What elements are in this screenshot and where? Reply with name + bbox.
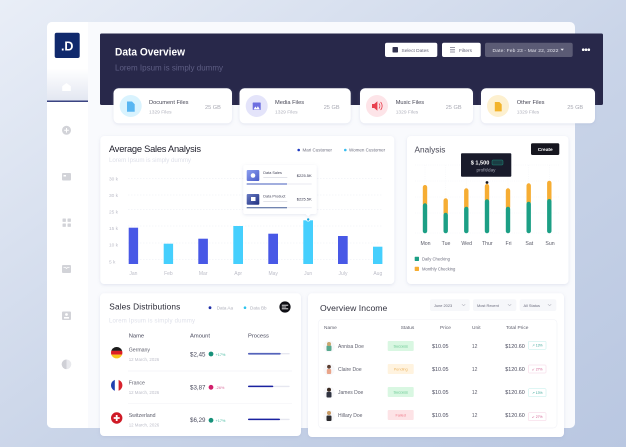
data sales row: Data Sales [263,171,282,175]
row: hillary doe [323,410,546,422]
file card: documents: Document Files [149,100,189,106]
file card: music: Music Files [396,100,424,106]
date range selector: Date: Feb 23 - Mar 22, 2022 [492,48,559,54]
weekday labels: Wed [461,241,472,247]
row: france: France [129,380,145,386]
icon: inbox [62,265,71,273]
row: hillary doe: $10.05 [432,413,448,419]
y axis labels [109,176,119,265]
y axis labels: 25 k [109,210,119,216]
row: james doe [323,387,546,398]
row: france: $3,87 [190,384,206,391]
y axis labels: 30 k [109,193,119,199]
file card: media: Media Files [275,100,304,106]
logo [55,33,80,58]
create button: Create [538,147,553,153]
panel: sales distributions [100,293,301,436]
table header: Name [324,325,337,331]
panel: overview income [308,293,564,437]
row: germany: +17% [216,353,226,357]
y axis labels: 5 k [109,259,116,265]
heading: Analysis [414,145,445,155]
x axis labels: Jan [129,271,138,277]
legend: Mari Customer [302,148,333,153]
row: france: 12 March, 2026 [129,390,160,395]
row: claire doe: Pending [394,367,408,371]
row: germany: $2,45 [190,351,206,358]
icon: add [62,126,71,135]
row: annisa doe: ↗ 13% [532,344,542,348]
tooltip: $ 1,500 [471,160,489,166]
panel: analysis [407,136,568,284]
row: claire doe: Claire Doe [338,367,362,373]
panel: average sales analysis [100,136,394,284]
logo: .D [61,40,73,54]
x axis labels: July [339,271,348,277]
table header [324,325,529,331]
icon: contrast [62,360,71,369]
bar chart [129,218,382,264]
subheading: Lorem Ipsum is simply dummy [109,157,192,164]
y axis grid [128,179,382,259]
date range selector [485,43,573,57]
file card: documents [114,88,232,123]
main window panel [47,22,575,428]
weekday labels: Sat [525,241,534,247]
weekday labels: Fri [505,241,512,247]
file card: music [360,88,473,123]
row: claire doe: $10.05 [432,367,448,373]
subtitle: Lorem Ipsum is simply dummy [115,63,223,72]
row: hillary doe: Failed [396,413,406,417]
x axis labels: May [268,271,278,277]
row: switzerland [111,412,290,427]
row: claire doe: $120.60 [505,367,525,373]
file card: documents: 1329 Files [149,109,172,115]
row: annisa doe: 12 [472,344,478,350]
icon: french flag [111,380,122,391]
dropdown filters [430,299,556,311]
stacked bars [425,183,549,231]
legend: Women Customer [349,148,386,153]
icon: german flag [111,347,123,359]
button: filters: Filters [459,48,473,54]
data sales row: $225.5K [297,173,312,178]
row: hillary doe: $120.60 [505,413,525,419]
subheading: Lorem Ipsum is simply dummy [109,318,195,324]
x axis labels: Mar [199,271,208,277]
button: select dates: Select Dates [402,48,429,54]
file card: other [481,88,595,123]
row: annisa doe: $120.60 [505,344,525,350]
icon: filter button [279,301,291,313]
file card: music: 1329 Files [396,109,419,115]
heading: Sales Distributions [109,302,180,312]
dropdown filters: June 2023 [434,303,452,308]
x axis labels [129,271,382,277]
heading: Overview Income [320,303,388,313]
icon: grid [62,218,71,227]
weekday labels: Sun [545,241,555,247]
weekday labels: Thur [482,241,493,247]
row: claire doe: 12 [472,367,478,373]
create button [531,143,559,155]
icon: swiss flag [111,412,122,424]
header banner [100,34,603,105]
row: annisa doe: $10.05 [432,344,448,350]
active menu item: home [47,68,88,102]
table header: Name [129,333,144,339]
row: switzerland: 12 March, 2026 [129,422,160,427]
table header: Unit [472,325,481,331]
row: james doe: ↗ 13% [532,391,542,395]
row: hillary doe: ↙ 27% [532,415,542,419]
y axis labels: 10 k [109,243,119,249]
x axis labels: Aug [373,271,382,277]
row: switzerland: Switzerland [129,413,156,419]
button: filters [442,43,481,57]
legend: Daily Checking [422,256,451,261]
dropdown filters: All Status [524,303,540,308]
row: germany: Germany [129,348,150,354]
file card: other: 1329 Files [517,109,540,115]
row: france: -26% [216,386,225,390]
row: claire doe: ↙ 27% [532,367,542,371]
weekday labels: Tue [442,241,450,247]
file card: media: 1329 Files [275,109,298,115]
file card: documents: 25 GB [205,105,221,111]
row: james doe: 12 [472,390,478,396]
y axis labels: 15 k [109,226,119,232]
legend [297,148,386,153]
row: james doe: Success [394,390,408,394]
row: france [111,379,290,395]
dropdown filters: Most Recent [477,303,500,308]
row: switzerland: +17% [216,419,226,423]
file card: media: 25 GB [324,105,340,111]
chart grid [415,165,559,233]
legend [209,305,267,310]
more menu [582,48,590,51]
x axis labels: Apr [234,271,242,277]
button: select dates [385,43,437,57]
weekday labels [420,241,555,247]
file card: other: Other Files [517,100,545,106]
table header: Process [248,333,269,339]
y axis labels: 30 k [109,176,119,182]
row: claire doe [323,364,546,375]
row: annisa doe: Annisa Doe [338,344,364,350]
table header: Amount [190,333,210,339]
x axis labels: Jun [304,271,312,277]
x axis labels: Feb [164,271,173,277]
data sales row [247,170,312,185]
table header: Total Price [506,325,529,331]
avatar [323,341,335,352]
legend: Data Aa [217,305,233,310]
weekday labels: Mon [420,241,431,247]
row: annisa doe: Success [394,344,408,348]
row: hillary doe: 12 [472,413,478,419]
table header: Price [440,325,451,331]
title: Data Overview [115,46,186,58]
row: james doe: James Doe [338,390,364,396]
row: james doe: $120.60 [505,390,525,396]
table header [129,333,269,339]
row: switzerland: $6,29 [190,417,206,424]
heading: Average Sales Analysis [109,144,201,154]
avatar [323,387,335,398]
file card: other: 25 GB [567,105,583,111]
table header: Status [401,325,415,331]
data product row [247,194,312,208]
tooltip card [243,165,317,216]
data product row: $225.5K [297,197,312,202]
icon: profile [62,312,71,320]
legend: Monthly Checking [422,266,456,271]
legend: Data Bb [250,305,267,310]
tooltip: profit/day [477,168,496,172]
row: germany [111,347,290,362]
row: annisa doe [323,341,546,352]
row: hillary doe: Hillary Doe [338,413,363,419]
file card: music: 25 GB [446,105,462,111]
row: germany: 12 March, 2026 [129,357,160,362]
avatar [323,410,335,422]
file card: media [240,88,351,123]
sidebar [47,22,88,428]
tooltip [461,153,511,184]
icon: image [62,173,71,180]
row: james doe: $10.05 [432,390,448,396]
income table [318,319,557,428]
data product row: Data Product [263,195,286,199]
legend [415,256,456,271]
avatar [323,364,335,375]
